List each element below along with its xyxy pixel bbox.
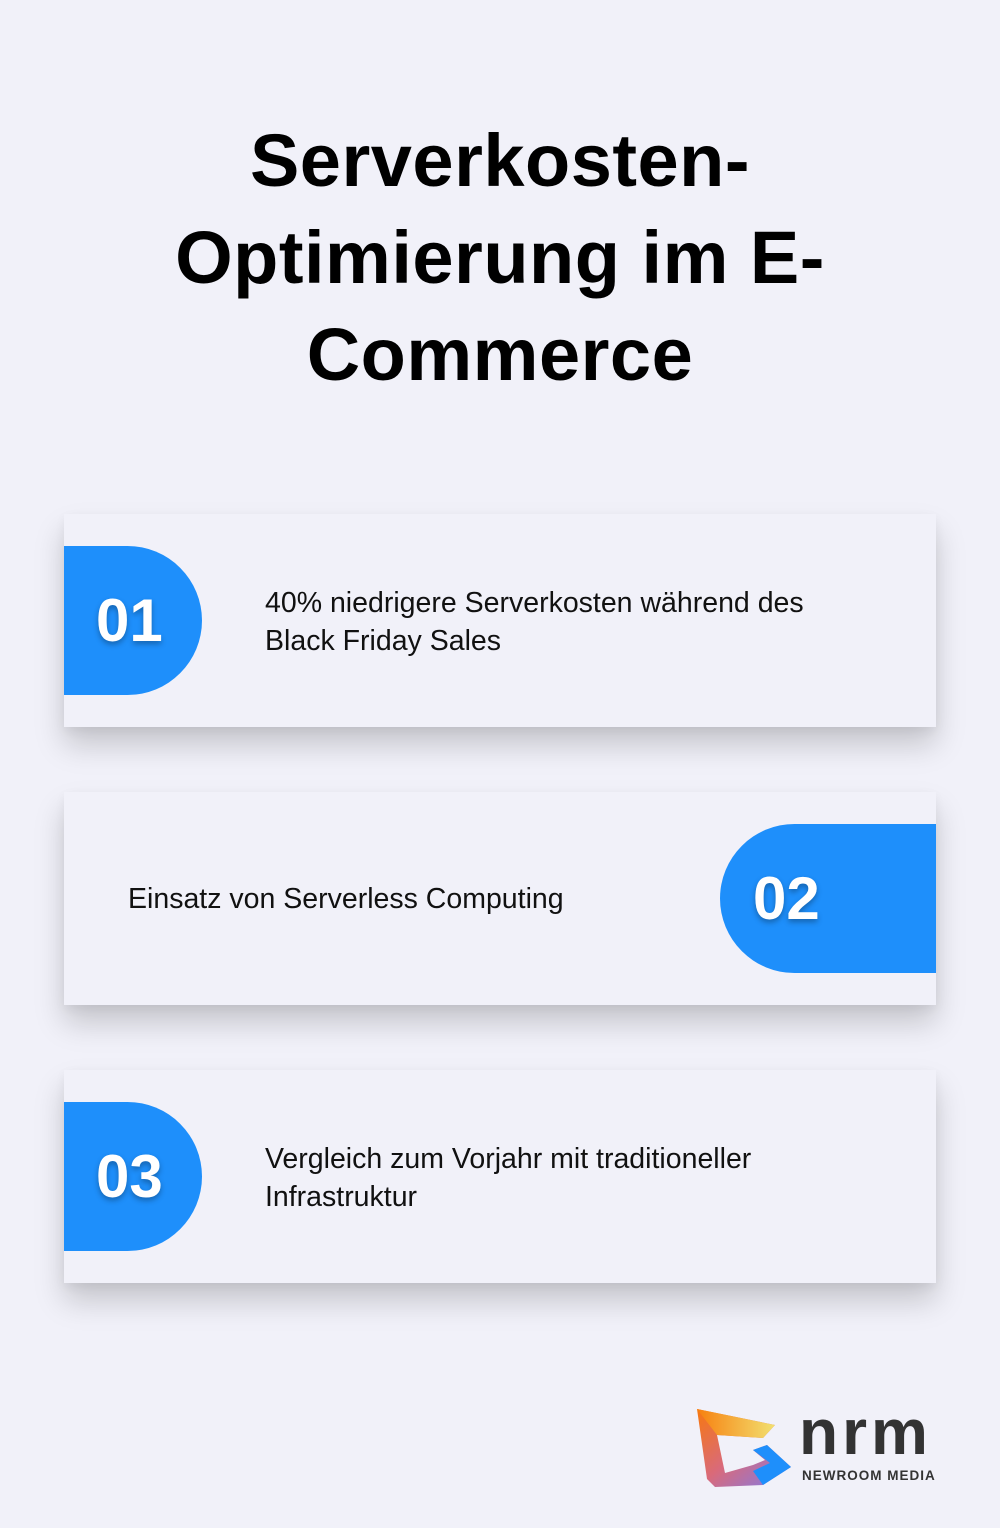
logo (697, 1396, 936, 1487)
card 2 (64, 792, 936, 1005)
logo text: nrm (799, 1396, 932, 1468)
card 3 (64, 1070, 936, 1283)
text 1: Black Friday Sales (265, 625, 501, 657)
icon: logo mark (697, 1409, 791, 1487)
text 3: Vergleich zum Vorjahr mit traditioneller (265, 1143, 751, 1175)
badge 02: 02 (753, 865, 820, 932)
badge 03 (64, 1102, 202, 1251)
text 3 (265, 1143, 751, 1213)
title: Commerce (307, 313, 693, 396)
text 1: 40% niedrigere Serverkosten während des (265, 587, 804, 619)
badge 02 (720, 824, 936, 973)
title: Optimierung im E- (175, 216, 825, 299)
title: Serverkosten- (250, 119, 750, 202)
logo: NEWROOM MEDIA (802, 1468, 936, 1483)
text 1 (265, 587, 804, 657)
text 3: Infrastruktur (265, 1181, 417, 1213)
card 1 (64, 514, 936, 727)
badge 01: 01 (96, 587, 163, 654)
text 2: Einsatz von Serverless Computing (128, 883, 564, 915)
badge 03: 03 (96, 1143, 163, 1210)
title (175, 119, 825, 396)
badge 01 (64, 546, 202, 695)
